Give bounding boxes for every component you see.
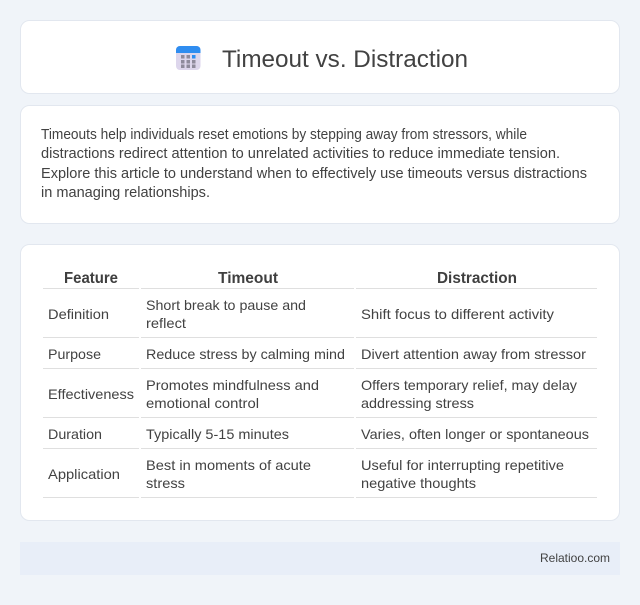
- row: application: stress: [146, 475, 185, 491]
- row: effectiveness: emotional control: [146, 395, 259, 411]
- table header: [64, 270, 517, 287]
- row: application: Useful for interrupting repetitive: [361, 457, 564, 473]
- intro text: Explore this article to understand when to effectively use timeouts versus distractions: [41, 166, 587, 182]
- title: Timeout vs. Distraction: [222, 46, 468, 73]
- row: application: Best in moments of acute: [146, 457, 311, 473]
- row: effectiveness: Effectiveness: [48, 386, 134, 402]
- header panel: [20, 20, 620, 94]
- icon: calendar: [176, 46, 200, 70]
- row: definition: Shift focus to different activity: [361, 306, 554, 322]
- intro text: [41, 127, 587, 201]
- intro panel: [20, 106, 620, 224]
- row: effectiveness: addressing stress: [361, 395, 474, 411]
- intro text: distractions redirect attention to unrelated activities to reduce immediate tension.: [41, 146, 560, 162]
- row: duration: [48, 426, 589, 442]
- row: purpose: [48, 346, 586, 362]
- footer bar: [20, 542, 620, 575]
- row: definition: [48, 297, 554, 331]
- table panel: [20, 244, 620, 520]
- row: application: Application: [48, 466, 120, 482]
- intro text: in managing relationships.: [41, 185, 210, 201]
- row: application: negative thoughts: [361, 475, 476, 491]
- row: duration: Varies, often longer or spontaneous: [361, 426, 589, 442]
- table header: Timeout: [218, 270, 279, 287]
- table header: Feature: [64, 270, 118, 287]
- row: effectiveness: Promotes mindfulness and: [146, 377, 319, 393]
- row: duration: Duration: [48, 426, 102, 442]
- row: definition: reflect: [146, 315, 186, 331]
- table header: Distraction: [437, 270, 517, 287]
- row: purpose: Reduce stress by calming mind: [146, 346, 345, 362]
- row: application: [48, 457, 564, 491]
- row: duration: Typically 5-15 minutes: [146, 426, 289, 442]
- row: effectiveness: Offers temporary relief, may delay: [361, 377, 577, 393]
- row: effectiveness: [48, 377, 577, 411]
- footer text: Relatioo.com: [540, 551, 610, 565]
- row: definition: Definition: [48, 306, 109, 322]
- row: definition: Short break to pause and: [146, 297, 306, 313]
- row: purpose: Purpose: [48, 346, 101, 362]
- row: purpose: Divert attention away from stressor: [361, 346, 586, 362]
- intro text: Timeouts help individuals reset emotions by stepping away from stressors, while: [41, 127, 527, 143]
